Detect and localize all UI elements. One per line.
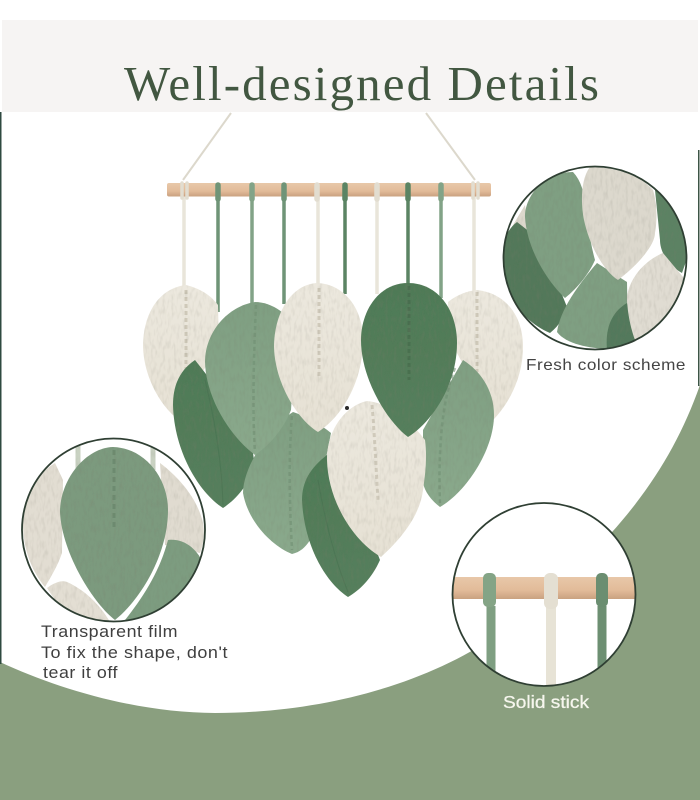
- caption: transparent film: tear it off: [43, 664, 118, 682]
- caption: transparent film: Transparent film: [41, 623, 178, 641]
- caption: transparent film: To fix the shape, don't: [41, 644, 228, 662]
- circle outline: [452, 503, 636, 686]
- caption: colour scheme: Fresh color scheme: [526, 357, 686, 374]
- circle base: [22, 438, 206, 622]
- leaf: cream far left: [143, 285, 219, 417]
- caption: transparent film: [41, 623, 228, 682]
- circle base: [503, 166, 687, 350]
- detail circle: colour scheme: [501, 166, 690, 350]
- leaf: cream lower center: [327, 401, 426, 557]
- string loops: [182, 183, 478, 199]
- leaf: cream far right: [448, 290, 523, 420]
- circle base: [452, 502, 636, 686]
- leaf: cream upper center: [274, 283, 363, 432]
- hanging strings: [184, 196, 474, 312]
- hanging cord: [183, 113, 475, 180]
- right edge line: [698, 150, 700, 386]
- wooden stick: [167, 183, 491, 196]
- title band: [2, 20, 698, 112]
- black fastener dot: [345, 406, 349, 410]
- circle outline: [22, 438, 205, 622]
- title: Well-designed Details: [124, 56, 599, 111]
- leaf: dark lower left: [173, 360, 255, 508]
- circle outline: [504, 166, 686, 350]
- zoomed leaves: [23, 445, 204, 622]
- leaves cluster: [143, 283, 523, 597]
- leaf: sage lower middle: [243, 412, 331, 554]
- wall hanging: [143, 113, 523, 597]
- leaf: sage upper left: [205, 302, 296, 455]
- detail circle: transparent film: [22, 438, 206, 622]
- green wave background: [0, 385, 700, 800]
- leaf: dark upper right: [361, 283, 457, 437]
- leaf: dark bottom: [302, 455, 380, 597]
- zoomed leaves: [501, 167, 690, 350]
- detail circle: solid stick: [452, 502, 636, 690]
- zoomed stick and strings: [452, 573, 636, 690]
- leaf: sage right: [423, 360, 494, 507]
- caption: solid stick: Solid stick: [503, 692, 589, 712]
- left edge line: [0, 112, 2, 664]
